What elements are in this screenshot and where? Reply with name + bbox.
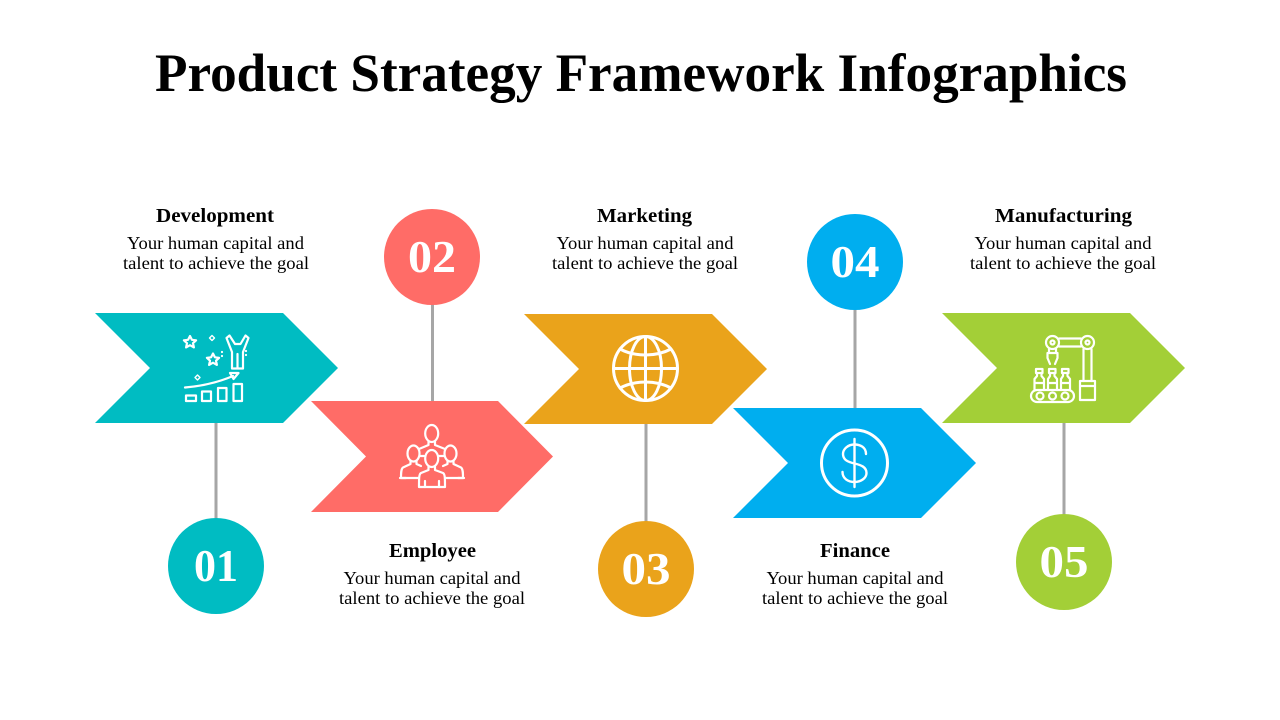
heading: employee: Employee [389,540,476,562]
heading: manufacturing: Manufacturing [995,205,1132,227]
text block: development: Your human capital and [127,233,304,253]
connector 03 [644,424,648,523]
icon: dollar coin [822,430,888,496]
circle 02: 02 [408,231,456,282]
step 2: employee [311,209,553,608]
arrow: green [942,313,1185,423]
arrow: blue [733,408,976,518]
heading: finance: Finance [820,540,890,562]
title: Product Strategy Framework Infographics [155,43,1127,103]
circle 02 [384,209,480,305]
circle 03: 03 [622,543,670,594]
text block: manufacturing: talent to achieve the goal [970,253,1156,273]
connector 04 [854,308,856,408]
step 1: development [95,205,338,614]
text block: finance: talent to achieve the goal [762,588,948,608]
text block: marketing: Your human capital and [556,233,734,253]
circle 03 [598,521,694,617]
circle 04: 04 [830,236,880,287]
icon: robot arm assembly line [1031,336,1095,402]
heading: development: Development [156,205,274,227]
connector 05 [1062,423,1066,516]
step 4: finance [733,214,976,608]
step 5: manufacturing [942,205,1185,610]
heading: marketing: Marketing [597,205,692,227]
text block: employee [339,568,525,608]
circle 01: 01 [194,540,238,591]
circle 01 [168,518,264,614]
text block: development: talent to achieve the goal [123,253,309,273]
connector 02 [431,303,434,401]
text block: finance [762,568,948,608]
text block: marketing: talent to achieve the goal [552,253,738,273]
circle 04 [807,214,903,310]
connector 01 [214,423,218,520]
text block: employee: Your human capital and [344,568,520,588]
arrow: coral [311,401,553,512]
text block: development [123,233,309,273]
text block: manufacturing: Your human capital and [974,233,1152,253]
arrow: teal [95,313,338,423]
arrow: amber [524,314,767,424]
circle 05 [1016,514,1112,610]
text block: manufacturing [970,233,1156,273]
icon: team [400,425,464,487]
text block: employee: talent to achieve the goal [339,588,525,608]
text block: finance: Your human capital and [766,568,944,588]
step 3: marketing [524,205,767,617]
icon: growth and celebration [184,336,248,401]
circle 05: 05 [1040,536,1088,587]
icon: globe [614,336,678,400]
text block: marketing [552,233,738,273]
